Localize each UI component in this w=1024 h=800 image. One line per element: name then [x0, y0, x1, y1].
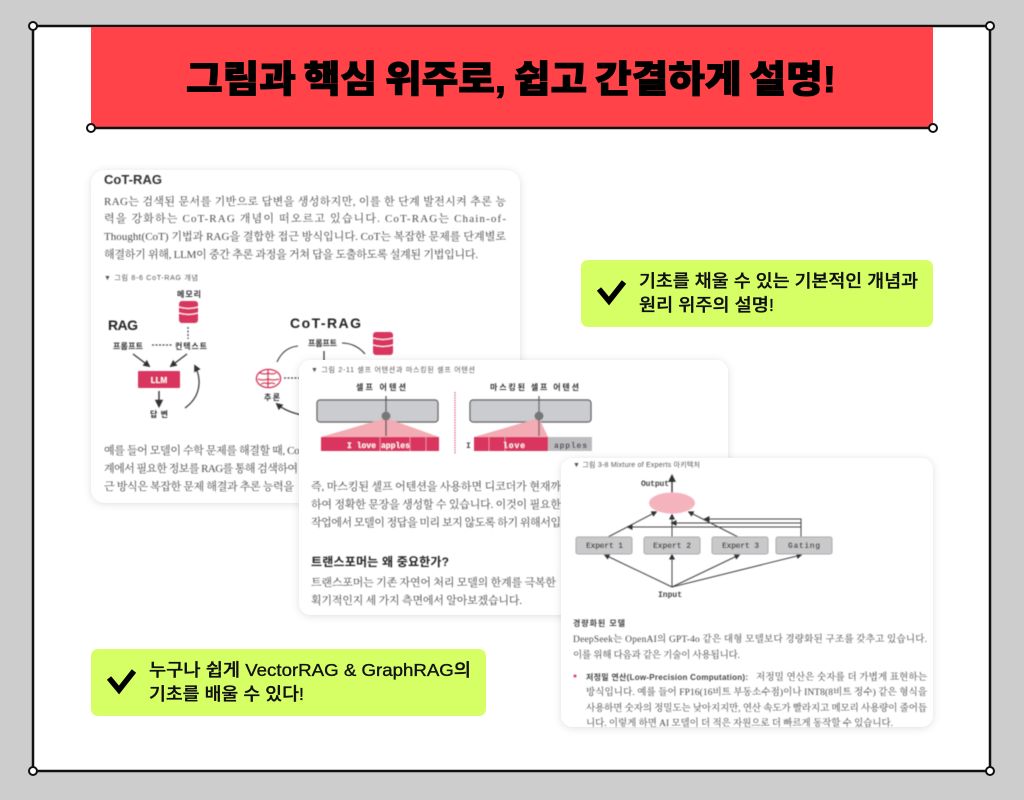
diagram: CoT-RAG: 추론: [264, 393, 281, 402]
diagram: Mixture of Experts: Output: [641, 480, 669, 489]
callout: anyone: [91, 649, 486, 716]
diagram: Mixture of Experts: Expert 1: [586, 542, 623, 551]
panel: Mixture of Experts page: [561, 458, 933, 729]
diagram: Mixture of Experts: Gating: [788, 542, 820, 551]
text block: masked attention: 즉, 마스킹된 셀프 어텐션을 사용하면 디코더가 현재까: [311, 479, 561, 493]
diagram: masked self-attention: I: [466, 442, 471, 451]
bullet: low-precision computation: 니다. 이렇게 하면 AI 모델이 더 적은 자원으로 더 빠르게 동작할 수 있습니다.: [586, 717, 893, 729]
bullet: low-precision computation: 저정밀 연산(Low-Precision Computation):: [586, 672, 748, 682]
text block: CoT-RAG intro: [104, 194, 506, 261]
diagram: RAG: LLM: [151, 376, 168, 385]
bullet: low-precision computation: 사용하면 숫자의 정밀도는 낮아지지만, 연산 속도가 빨라지고 메모리 사용량이 줄어듭: [586, 702, 927, 714]
callout: anyone: 누구나 쉽게 VectorRAG & GraphRAG의: [149, 660, 471, 680]
diagram: self-attention: I love apples: [347, 442, 410, 451]
icon: check mark: [599, 282, 624, 301]
diagram: masked self-attention: love: [503, 442, 525, 451]
text block: CoT-RAG example: [104, 443, 306, 493]
diagram: RAG: 메모리: [177, 289, 201, 299]
diagram: RAG: 답변: [150, 409, 168, 419]
panel: CoT-RAG page: [91, 170, 520, 503]
panel: masked self-attention page: [299, 360, 728, 615]
icon: check mark: [109, 671, 134, 690]
text block: CoT-RAG example: 예를 들어 모델이 수학 문제를 해결할 때, CoT: [104, 443, 306, 457]
diagram: RAG: 컨텍스트: [175, 341, 208, 351]
callout: basics: [581, 260, 933, 327]
text block: transformers: 트랜스포머는 기존 자연어 처리 모델의 한계를 극복한: [311, 575, 556, 589]
diagram: RAG: [108, 289, 208, 419]
diagram: Mixture of Experts: Expert 2: [653, 542, 691, 551]
diagram: CoT-RAG: CoT-RAG: [290, 315, 361, 331]
diagram: RAG: RAG: [108, 317, 138, 333]
callout: basics: 기초를 채울 수 있는 기본적인 개념과: [639, 271, 918, 291]
callout: basics: 원리 위주의 설명!: [639, 295, 774, 315]
text block: CoT-RAG example: 계에서 필요한 정보를 RAG를 통해 검색하여: [104, 461, 298, 475]
caption: figure 3-8: ▼ 그림 3-8 Mixture of Experts 아키텍처: [573, 460, 700, 469]
text block: lightweight model: 경량화된 모델: [573, 618, 625, 628]
diagram: self-attention: 셀프 어텐션: [356, 382, 406, 392]
text block: transformers: 획기적인지 세 가지 측면에서 알아보겠습니다.: [311, 593, 522, 607]
text block: masked attention: 하여 정확한 문장을 생성할 수 있습니다. 이것이 필요한: [311, 497, 561, 511]
bullet: low-precision computation: [574, 671, 927, 729]
diagram: Mixture of Experts: Input: [658, 591, 682, 600]
text block: lightweight model: DeepSeek는 OpenAI의 GPT-4o 같은 대형 모델보다 경량화된 구조를 갖추고 있습니다.: [573, 633, 927, 645]
diagram: Mixture of Experts: Expert 3: [722, 542, 759, 551]
text block: CoT-RAG intro: RAG는 검색된 문서를 기반으로 답변을 생성하지만, 이를 한 단계 발전시켜 추론 능: [104, 194, 506, 208]
bullet: low-precision computation: 저정밀 연산은 숫자를 더 가볍게 표현하는: [756, 671, 927, 683]
diagram: Mixture of Experts: [576, 476, 832, 600]
caption: figure 8-6: ▼ 그림 8-6 CoT-RAG 개념: [104, 273, 198, 282]
diagram: self-attention: [317, 382, 439, 451]
callout: anyone: 기초를 배울 수 있다!: [149, 684, 304, 704]
text block: lightweight model: 이를 위해 다음과 같은 기술이 사용됩니다.: [573, 649, 740, 661]
text block: masked attention: [311, 479, 561, 529]
text block: CoT-RAG intro: 해결하기 위해, LLM이 중간 추론 과정을 거쳐 답을 도출하도록 설계된 기법입니다.: [104, 247, 478, 261]
heading: CoT-RAG: CoT-RAG: [104, 172, 162, 187]
diagram: CoT-RAG: 프롬프트: [308, 339, 338, 348]
text block: masked attention: 작업에서 모델이 정답을 미리 보지 않도록 하기 위해서입: [311, 515, 561, 529]
diagram: masked self-attention: 마스킹된 셀프 어텐션: [490, 382, 579, 392]
bullet: low-precision computation: 방식입니다. 예를 들어 FP16(16비트 부동소수점)이나 INT8(8비트 정수) 같은 형식을: [586, 686, 927, 698]
caption: figure 2-11: ▼ 그림 2-11 셀프 어텐션과 마스킹된 셀프 어텐션: [311, 365, 475, 374]
text block: CoT-RAG intro: Thought(CoT) 기법과 RAG을 결합한 접근 방식입니다. CoT는 복잡한 문제를 단계별로: [104, 229, 506, 243]
diagram: RAG: 프롬프트: [113, 342, 144, 351]
diagram: CoT-RAG: [256, 315, 393, 415]
title: 그림과 핵심 위주로, 쉽고 간결하게 설명!: [186, 59, 836, 100]
text block: CoT-RAG example: 근 방식은 복잡한 문제 해결과 추론 능력을: [104, 479, 294, 493]
text block: lightweight model: [573, 618, 927, 661]
banner: [91, 27, 933, 128]
diagram: masked self-attention: apples: [554, 442, 587, 451]
text block: CoT-RAG intro: 력을 강화하는 CoT-RAG 개념이 떠오르고 있습니다. CoT-RAG는 Chain-of-: [104, 211, 506, 225]
heading: why transformers matter: 트랜스포머는 왜 중요한가?: [311, 554, 449, 569]
diagram: masked self-attention: [466, 382, 592, 451]
text block: transformers: [311, 575, 556, 607]
